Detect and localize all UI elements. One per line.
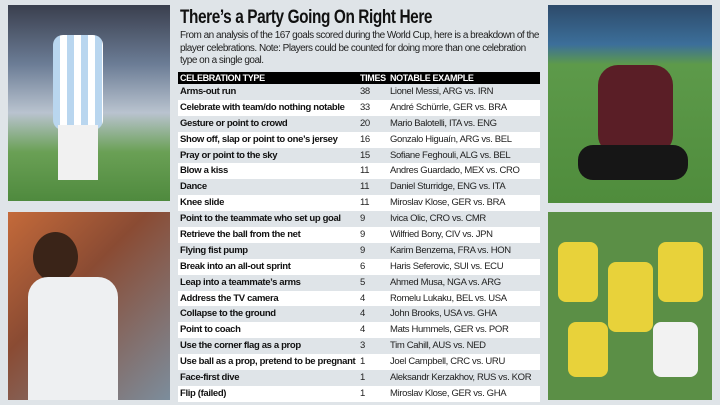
table: celebrations: Use ball as a prop, pretend to be pregnant [180, 356, 355, 367]
table: celebrations: Break into an all-out sprint [180, 261, 291, 272]
table: celebrations: Gonzalo Higuaín, ARG vs. BEL [390, 134, 512, 145]
table: celebrations: 1 [360, 372, 365, 383]
table: celebrations: Lionel Messi, ARG vs. IRN [390, 86, 493, 97]
table: celebrations: 11 [360, 197, 369, 208]
table: celebrations: Dance [180, 181, 207, 192]
table: celebrations: 4 [360, 293, 365, 304]
table: celebrations: Knee slide [180, 197, 224, 208]
photo: top left player [8, 5, 170, 201]
intro text: From an analysis of the 167 goals scored during the World Cup, here is a breakdown of the player celebrations. Note: Players could be counted for doing more than one celebration type on a single goal. [180, 30, 539, 66]
table: celebrations: Miroslav Klose, GER vs. BRA [390, 197, 505, 208]
table: celebrations: NOTABLE EXAMPLE [390, 73, 474, 83]
table: celebrations: John Brooks, USA vs. GHA [390, 308, 497, 319]
table: celebrations: 33 [360, 102, 370, 113]
table: celebrations: Blow a kiss [180, 165, 228, 176]
photo: bottom left player [8, 212, 170, 400]
table: celebrations: 11 [360, 165, 369, 176]
table: celebrations: Andres Guardado, MEX vs. CRO [390, 165, 520, 176]
table: celebrations: Flying fist pump [180, 245, 248, 256]
table: celebrations: 9 [360, 229, 365, 240]
table: celebrations: Joel Campbell, CRC vs. URU [390, 356, 505, 367]
table: celebrations: 38 [360, 86, 370, 97]
table: celebrations: 3 [360, 340, 365, 351]
table: celebrations: Point to the teammate who set up goal [180, 213, 341, 224]
table: celebrations: Sofiane Feghouli, ALG vs. BEL [390, 150, 510, 160]
table: celebrations: CELEBRATION TYPE [180, 73, 265, 83]
table: celebrations: Retrieve the ball from the net [180, 229, 300, 240]
table: celebrations: Collapse to the ground [180, 308, 276, 319]
table: celebrations: Leap into a teammate’s arms [180, 277, 301, 288]
table: celebrations: Use the corner flag as a prop [180, 340, 301, 351]
table: celebrations: Tim Cahill, AUS vs. NED [390, 340, 486, 351]
table: celebrations: 9 [360, 213, 365, 224]
table: celebrations: 1 [360, 388, 365, 399]
table: celebrations: Mario Balotelli, ITA vs. ENG [390, 118, 497, 129]
photo: top right player [548, 5, 712, 203]
table: celebrations: 1 [360, 356, 365, 367]
table: celebrations: Gesture or point to crowd [180, 118, 287, 129]
table: celebrations: André Schürrle, GER vs. BRA [390, 102, 507, 113]
table: celebrations [178, 72, 540, 402]
table: celebrations: 11 [360, 181, 369, 192]
table: celebrations: Ahmed Musa, NGA vs. ARG [390, 277, 501, 288]
table: celebrations: TIMES [360, 73, 386, 83]
table: celebrations: Arms-out run [180, 86, 236, 97]
photo: bottom right players [548, 212, 712, 400]
table: celebrations: Address the TV camera [180, 293, 278, 304]
table: celebrations: Celebrate with team/do nothing notable [180, 102, 345, 113]
table: celebrations: 4 [360, 324, 365, 335]
table: celebrations: 5 [360, 277, 365, 288]
table: celebrations: Karim Benzema, FRA vs. HON [390, 245, 511, 256]
table: celebrations: Haris Seferovic, SUI vs. ECU [390, 261, 503, 272]
table: celebrations: 4 [360, 308, 365, 319]
table: celebrations: Pray or point to the sky [180, 150, 277, 160]
table: celebrations: Mats Hummels, GER vs. POR [390, 324, 508, 335]
table: celebrations: 15 [360, 150, 370, 160]
table: celebrations: Flip (failed) [180, 388, 226, 399]
table: celebrations: 9 [360, 245, 365, 256]
table: celebrations: Wilfried Bony, CIV vs. JPN [390, 229, 493, 240]
table: celebrations: Point to coach [180, 324, 241, 335]
table: celebrations: Aleksandr Kerzakhov, RUS vs. KOR [390, 372, 531, 383]
table: celebrations: Ivica Olic, CRO vs. CMR [390, 213, 486, 224]
table: celebrations: Daniel Sturridge, ENG vs. ITA [390, 181, 505, 192]
table: celebrations: Miroslav Klose, GER vs. GHA [390, 388, 506, 399]
table: celebrations: 16 [360, 134, 370, 145]
main panel [178, 7, 540, 402]
table: celebrations: Show off, slap or point to one’s jersey [180, 134, 338, 145]
table: celebrations: 20 [360, 118, 370, 129]
title: There’s a Party Going On Right Here [180, 7, 432, 28]
table: celebrations: Romelu Lukaku, BEL vs. USA [390, 293, 507, 304]
table: celebrations: Face-first dive [180, 372, 239, 383]
table: celebrations: 6 [360, 261, 365, 272]
